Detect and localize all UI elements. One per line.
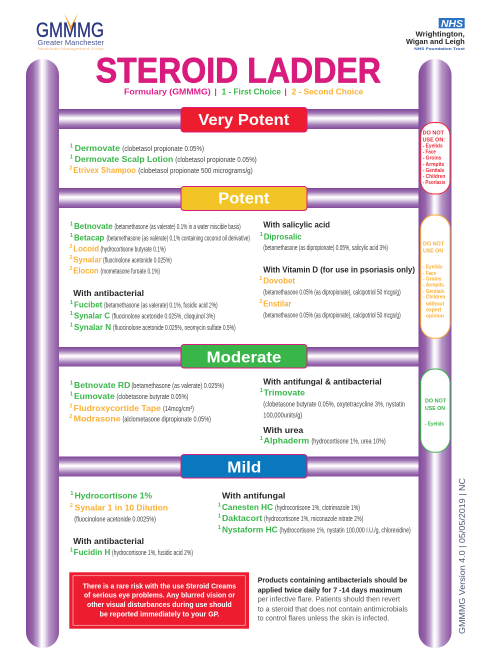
drug list: moderate, left column: 2: [70, 414, 72, 420]
drug list: potent, right column: [260, 221, 415, 319]
subtitle: formulary key: [124, 87, 364, 96]
ladder rungs: [55, 109, 423, 476]
drug list: moderate, right column: With antifungal & antibacterial: [263, 377, 382, 386]
drug list: moderate, left column: (betamethasone (as valerate) 0.025%): [132, 381, 224, 390]
drug list: mild, right column: Daktacort: [222, 514, 263, 523]
drug list: mild, right column: [218, 492, 411, 534]
drug list: moderate, left column: [70, 380, 224, 424]
logo: GMMMG: GMMMG: [36, 19, 104, 42]
drug list: potent, left column: Synalar C: [74, 311, 110, 320]
drug list: mild, left column: With antibacterial: [73, 537, 144, 546]
drug list: moderate, right column: Alphaderm: [264, 437, 309, 446]
title: STEROID LADDER: [96, 52, 381, 91]
logo: NHS trust: Wigan and Leigh: [406, 39, 465, 46]
drug list: moderate, left column: 2: [70, 404, 72, 410]
drug list: potent, right column: 2: [260, 299, 262, 305]
drug list: mild, right column: (hydrocortisone 1%, clotrimazole 1%): [275, 503, 360, 512]
panel: Potent: [70, 186, 415, 332]
drug list: mild, left column: Hydrocortisone 1%: [75, 492, 152, 501]
drug list: moderate, left column: Betnovate RD: [74, 381, 131, 390]
drug list: very potent: (clobetasol propionate 0.05%): [122, 144, 204, 153]
drug list: potent, left column: 1: [70, 311, 73, 317]
drug list: very potent: (clobetasol propionate 0.05%): [175, 155, 257, 164]
side label: potent, do not use on: - Groins: [423, 277, 442, 283]
drug list: very potent: [70, 144, 257, 175]
drug list: potent, left column: (betamethasone (as valerate) 0.1% containing coconut oil derivative): [106, 233, 250, 242]
drug list: potent, left column: 1: [70, 233, 73, 239]
drug list: potent, right column: Dovobet: [263, 277, 295, 286]
badge: Potent: [181, 186, 307, 210]
drug list: moderate, left column: (alclometasone dipropionate 0.05%): [122, 415, 211, 424]
side label: very potent, do not use on: - Armpits: [423, 162, 445, 168]
side label: very potent, do not use on: [421, 122, 450, 194]
logo: GMMMG: Greater Manchester: [38, 40, 105, 47]
drug list: potent, left column: [70, 222, 250, 332]
drug list: potent, right column: Enstilar: [263, 300, 291, 309]
drug list: moderate, left column: Fludroxycortide Tape: [74, 404, 162, 413]
drug list: moderate, left column: Eumovate: [74, 392, 115, 401]
drug list: potent, left column: 1: [70, 300, 73, 306]
logo: NHS trust: Wrightington,: [416, 32, 465, 39]
drug list: very potent: Dermovate Scalp Lotion: [75, 155, 173, 164]
side label: moderate, do not use on: - Eyelids: [425, 422, 444, 428]
drug list: moderate, left column: 1: [70, 380, 73, 386]
note: antibacterial products: to a steroid that does not contain antimicrobials: [258, 604, 408, 613]
drug list: mild, right column: 1: [218, 514, 221, 520]
logo: NHS trust: NHS: [441, 19, 463, 30]
side label: potent, do not use on: [421, 215, 450, 338]
drug list: potent, left column: 2: [70, 266, 72, 272]
drug list: moderate, left column: (clobetasone butyrate 0.05%): [116, 392, 188, 401]
drug list: very potent: 2: [70, 166, 72, 172]
drug list: very potent: Etrivex Shampoo: [73, 166, 136, 175]
side label: very potent, do not use on: - Eyelids: [423, 143, 443, 149]
drug list: moderate, left column: 1: [70, 392, 73, 398]
panel: Moderate: [70, 344, 405, 446]
drug list: potent, left column: (betamethasone (as valerate) 0.1%, fusidic acid 2%): [104, 300, 218, 309]
drug list: mild, left column: 1: [70, 548, 73, 554]
drug list: potent, left column: 2: [70, 244, 72, 250]
side label: potent, do not use on: - Children: [423, 295, 445, 301]
callout: eye problems warning: be reported immediately to your GP.: [100, 611, 219, 618]
note: antibacterial products: [258, 576, 408, 623]
logo: GMMMG: [36, 13, 105, 51]
side label: very potent, do not use on: - Groins: [423, 156, 442, 162]
side label: potent, do not use on: without: [425, 302, 445, 308]
ladder rail: right: [418, 59, 452, 648]
drug list: mild, right column: With antifungal: [222, 492, 285, 501]
drug list: potent, left column: Betacap: [74, 233, 104, 242]
drug list: moderate, right column: 100,000units/g): [263, 411, 302, 420]
subtitle: formulary key: 1 - First Choice: [222, 87, 282, 96]
drug list: potent, left column: Elocon: [73, 267, 99, 276]
badge: Moderate: Moderate: [207, 350, 281, 367]
logo: GMMMG: Medicines Management Group: [38, 46, 105, 51]
drug list: very potent: 1: [70, 144, 73, 150]
drug list: potent, left column: (fluocinolone acetonide 0.025%, clioquinol 3%): [112, 311, 215, 320]
drug list: mild, right column: 1: [218, 525, 221, 531]
drug list: potent, left column: (mometasone furoate 0.1%): [100, 267, 160, 276]
side label: very potent, do not use on: DO NOT: [423, 131, 444, 137]
drug list: potent, left column: 1: [70, 322, 73, 328]
badge: Potent: Potent: [218, 190, 270, 207]
drug list: potent, left column: Betnovate: [74, 222, 113, 231]
badge: Very Potent: [181, 108, 307, 132]
drug list: mild, left column: (hydrocortisone 1%, fusidic acid 2%): [112, 548, 193, 557]
side label: potent, do not use on: - Armpits: [423, 283, 444, 289]
side label: very potent, do not use on: - Face: [423, 149, 436, 155]
drug list: potent, left column: (hydrocortisone butyrate 0.1%): [100, 245, 166, 254]
drug list: potent, right column: 1: [260, 232, 263, 238]
logo: NHS trust: [406, 18, 466, 51]
drug list: potent, right column: 2: [260, 276, 262, 282]
drug list: potent, left column: (betamethasone (as valerate) 0.1% in a water miscible basis): [114, 222, 241, 231]
drug list: potent, right column: Diprosalic: [264, 232, 302, 241]
drug list: moderate, right column: 1: [260, 436, 263, 442]
drug list: potent, left column: 2: [70, 255, 72, 261]
version note: GMMMG Version 4.0 | 05/05/2019 | NC: [457, 478, 467, 634]
drug list: mild, right column: Nystaform HC: [222, 525, 278, 534]
side label: potent, do not use on: DO NOT: [423, 241, 444, 247]
drug list: potent, right column: With Vitamin D (for use in psoriasis only): [263, 266, 415, 275]
drug list: moderate, right column: With urea: [263, 426, 304, 435]
drug list: potent, left column: (fluocinolone acetonide 0.025%, neomycin sulfate 0.5%): [113, 323, 236, 332]
side label: potent, do not use on: opinion: [426, 314, 444, 320]
drug list: moderate, right column: [260, 377, 405, 446]
panel: Very Potent: [70, 108, 307, 175]
drug list: mild, right column: 1: [218, 502, 221, 508]
badge: Mild: Mild: [227, 459, 261, 476]
drug list: potent, left column: 1: [70, 222, 73, 228]
subtitle: formulary key: |: [214, 88, 217, 96]
side label: very potent, do not use on: - Psoriasis: [423, 180, 446, 186]
drug list: potent, right column: (betamethasone 0.05% (as dipropionate), calcipotriol 50 mcgs/g): [263, 310, 401, 319]
side label: potent, do not use on: - Face: [423, 271, 436, 277]
drug list: moderate, left column: Modrasone: [74, 415, 121, 424]
drug list: moderate, right column: Trimovate: [264, 389, 306, 398]
note: antibacterial products: Products containing antibacterials should be: [258, 576, 407, 585]
drug list: mild, left column: (fluocinolone acetonide 0.0025%): [74, 514, 156, 523]
drug list: very potent: Dermovate: [75, 144, 121, 153]
subtitle: formulary key: Formulary (GMMMG): [124, 87, 211, 96]
drug list: potent, left column: Locoid: [73, 245, 99, 254]
drug list: moderate, left column: (14mcg/cm²): [163, 404, 194, 413]
drug list: mild, left column: 1: [70, 491, 74, 497]
callout: eye problems warning: other visual disturbances during use should: [87, 602, 232, 609]
note: antibacterial products: applied twice daily for 7 -14 days maximum: [258, 586, 402, 595]
callout: eye problems warning: of serious eye problems. Any blurred vision or: [84, 593, 235, 600]
drug list: potent, left column: With antibacterial: [73, 289, 144, 298]
drug list: potent, left column: Synalar: [73, 256, 102, 265]
drug list: moderate, right column: (clobetasone butyrate 0.05%, oxytetracycline 3%, nystatin: [263, 400, 405, 409]
side label: potent, do not use on: - Genitals: [423, 289, 445, 295]
side label: very potent, do not use on: - Children: [423, 174, 445, 180]
badge: Very Potent: Very Potent: [198, 112, 290, 129]
drug list: moderate, right column: 1: [260, 388, 263, 394]
side label: moderate, do not use on: DO NOT: [425, 399, 446, 405]
drug list: mild, left column: [70, 491, 193, 557]
drug list: very potent: (clobetasol propionate 500 micrograms/g): [138, 166, 253, 175]
drug list: mild, left column: 2: [70, 503, 73, 509]
side label: moderate, do not use on: [421, 369, 450, 452]
drug list: potent, right column: With salicylic acid: [263, 221, 330, 230]
side label: very potent, do not use on: - Genitals: [423, 168, 445, 174]
side label: very potent, do not use on: USE ON:: [423, 137, 445, 143]
subtitle: formulary key: 2 - Second Choice: [292, 87, 364, 96]
drug list: potent, left column: Fucibet: [74, 300, 103, 309]
drug list: very potent: 1: [70, 154, 73, 160]
drug list: mild, left column: Synalar 1 in 10 Dilution: [75, 504, 168, 513]
drug list: potent, right column: (betamethasone 0.05% (as dipropionate), calcipotriol 50 mcgs/g): [263, 287, 401, 296]
side label: potent, do not use on: USE ON: [423, 249, 443, 255]
note: antibacterial products: to control flares unless the skin is infected.: [258, 614, 389, 623]
drug list: mild, right column: (hydrocortisone 1%, nystatin 100,000 I.U./g, chlorexidine): [280, 525, 411, 534]
badge: Mild: [181, 454, 307, 478]
panel: Mild: [70, 454, 411, 557]
badge: Moderate: [181, 344, 307, 368]
drug list: mild, right column: Canesten HC: [222, 503, 273, 512]
drug list: potent, left column: (fluocinolone acetonide 0.025%): [103, 256, 172, 265]
logo: NHS trust: NHS Foundation Trust: [414, 47, 466, 51]
side label: potent, do not use on: expert: [426, 308, 442, 314]
callout: eye problems warning: There is a rare risk with the use Steroid Creams: [83, 583, 236, 590]
note: antibacterial products: per infective flare. Patients should then revert: [258, 595, 400, 604]
drug list: moderate, right column: (hydrocortisone 1%, urea 10%): [312, 437, 386, 446]
ladder rail: left: [26, 59, 59, 648]
subtitle: formulary key: |: [284, 88, 287, 96]
callout: eye problems warning: [69, 572, 249, 629]
drug list: potent, right column: (betamethasone (as dipropionate) 0.05%, salicylic acid 3%): [263, 243, 388, 252]
side label: potent, do not use on: - Eyelids: [423, 265, 443, 271]
drug list: potent, left column: Synalar N: [74, 323, 111, 332]
side label: moderate, do not use on: USE ON: [425, 406, 445, 412]
drug list: mild, right column: (hydrocortisone 1%, miconazole nitrate 2%): [264, 514, 363, 523]
drug list: mild, left column: Fucidin H: [74, 548, 111, 557]
